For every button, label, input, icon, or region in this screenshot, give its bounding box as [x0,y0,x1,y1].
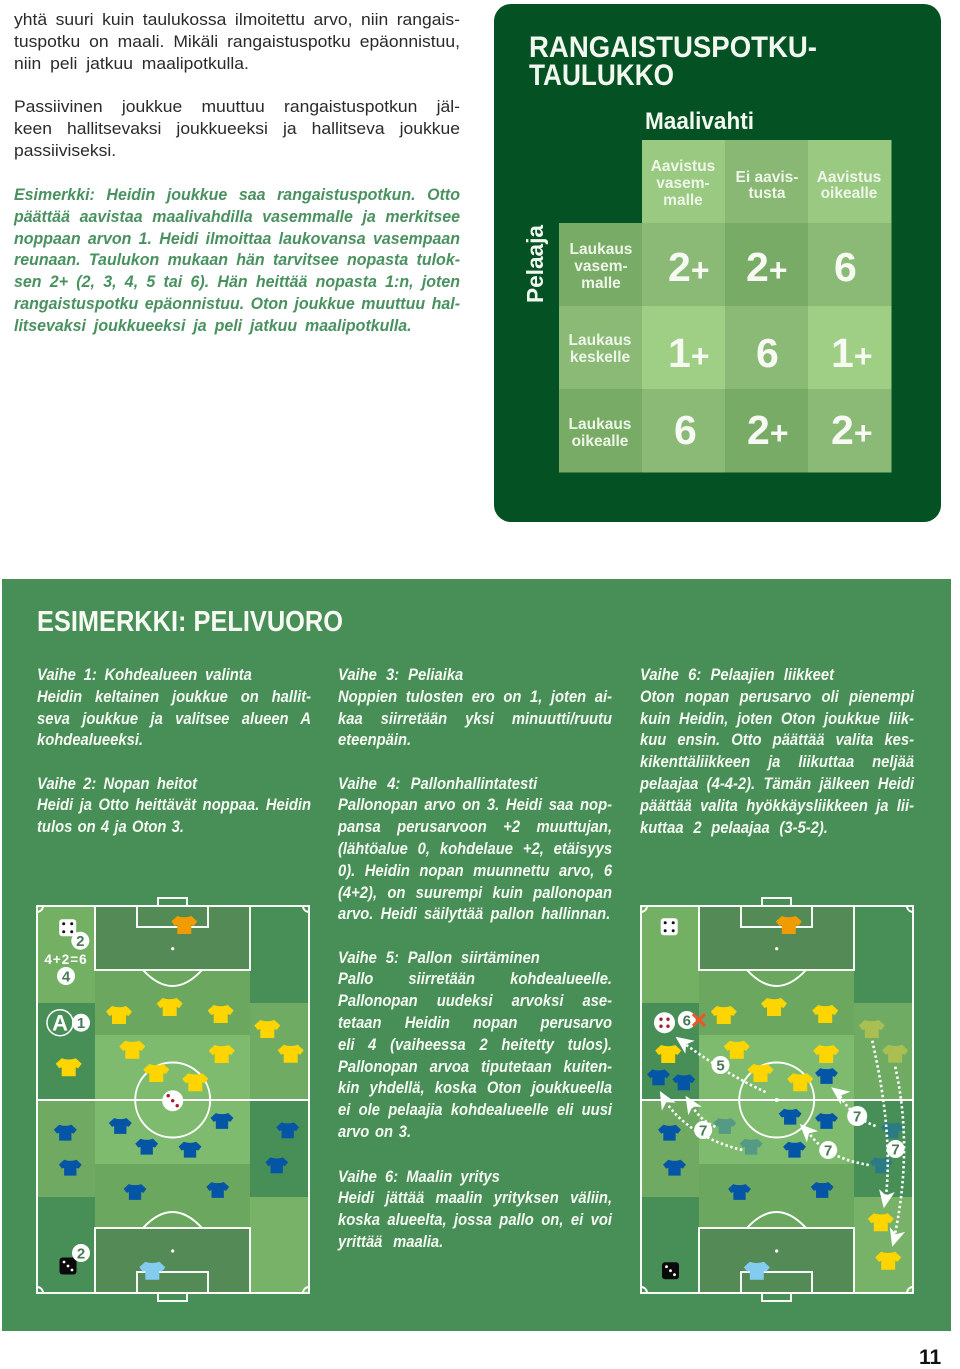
step badges: 7 [824,1142,832,1160]
table header labels: tusta [748,185,786,202]
goalkeeper orange [775,916,801,934]
text: step 6 player moves: Vaihe 6: Pelaajien liikkeet [640,665,834,684]
yellow team [655,998,901,1270]
text: step 6 player moves [640,665,914,837]
text block: penalty example: litsevaksi joukkueeksi ja peli jatkuu maalipotkulla. [14,316,412,335]
white die four [59,919,76,936]
text block: penalty example: reunaan. Taulukon mukaan hän tarvitsee nopasta tulok- [14,250,460,269]
table values: 1+ [831,330,872,376]
text: step 3: Vaihe 3: Peliaika [338,665,463,684]
text: step 1 [37,665,311,749]
text: step 4: (4+2), on suurempi kuin pallonopan [338,883,612,902]
text block: penalty example: Esimerkki: Heidin joukkue saa rangaistuspotkun. Otto [14,185,460,204]
badge 4: 4 [62,968,71,986]
step badges: 7 [699,1122,707,1140]
text block: rule continuation: tuspotku on maali. Mikäli rangaistuspotku epäonnistuu, [14,32,460,51]
text: step 2: Heidi ja Otto heittävät noppaa. Heidin [37,795,311,814]
text: step 5: tetaan Heidin nopan perusarvo [338,1013,612,1032]
orange cross [692,1014,704,1026]
text: step 3: Noppien tulosten ero on 1, joten ai- [338,687,612,706]
ball die [162,1090,183,1111]
text: step 5: Pallo siirretään kohdealueelle. [338,969,612,988]
text: step 6 goal attempt [337,1166,612,1251]
table row labels: oikealle [572,433,629,450]
text: step 4: Pallonopan arvo on 3. Heidi saa nop- [338,795,612,814]
table values: 2+ [746,244,788,290]
yellow team [56,998,304,1091]
white die [660,918,677,935]
chart: right pitch [640,897,914,1302]
table values: 6 [674,407,697,453]
faded moved blue [713,1118,903,1173]
axis label: player: Pelaaja [522,225,548,303]
step badges: 7 [853,1108,861,1126]
table header labels: oikealle [821,185,878,202]
table row labels: Laukaus [569,332,631,349]
table header labels: Aavistus [651,158,715,175]
dotted movement arrows [652,1030,905,1249]
table row labels [569,241,632,450]
panel: example turn background [2,579,951,1331]
table header labels: Ei aavis- [736,169,798,186]
black die [662,1262,678,1279]
table title: TAULUKKO [529,59,674,92]
badge 6 [677,1011,695,1030]
text: step 4: arvo. Heidi säilyttää pallon hallinnan. [338,904,610,923]
text block: penalty example: rangaistuspotku epäonnistuu. Oton joukkue muuttuu hal- [14,294,460,313]
text: step 2: tulos on 4 ja Oton 3. [37,817,184,836]
table values: 1+ [668,330,710,376]
text: step 1: Vaihe 1: Kohdealueen valinta [37,665,252,684]
area A marker: A [52,1011,68,1036]
goalkeeper orange [171,916,197,934]
table row labels: malle [581,275,621,292]
text: step 6 goal attempt: koska alueelta, jossa pallo on, ei voi [338,1210,612,1229]
text: step 6 goal attempt: yrittää maalia. [338,1232,443,1251]
centre spot [774,1098,778,1102]
text: step 1: kohdealueeksi. [37,730,143,749]
faded moved yellow [858,1020,908,1063]
text: step 1: seva joukkue ja valitsee alueen A [37,709,311,728]
ball die four [654,1012,674,1033]
table title: RANGAISTUSPOTKU- [529,31,817,64]
text block: passive team: passiiviseksi. [14,141,116,160]
table title [529,31,817,92]
page number: 11 [919,1346,941,1369]
goalkeeper light blue [139,1262,165,1280]
text block: penalty example: päättää aavistaa maalivahdilla vasemmalle ja merkitsee [14,207,460,226]
text: step 5: eli 4 (vaiheessa 2 heitetty tulos). [338,1035,612,1054]
table values: 2+ [831,407,872,453]
text: step 6 player moves: kuttaa 2 pelaajaa (3-5-2). [640,818,828,837]
blue team [54,1113,299,1200]
table cells [559,140,892,472]
text: step 6 player moves: kikenttäliikkeen ja liikuttaa neljää [640,752,914,771]
black die [60,1258,76,1274]
badge 1 [72,1014,90,1032]
text block: passive team: keen hallitsevaksi joukkueeksi ja hallitseva joukkue [14,119,460,138]
text: step 5: ei ole pelaajia kohdealueelle eli uusi [338,1100,612,1119]
text: step 6 goal attempt: Heidi jättää maalin yrityksen väliin, [338,1188,612,1207]
text: step 6 player moves: kuin Heidin, joten Oton joukkue liik- [640,709,914,728]
badge 1: 1 [77,1015,85,1032]
text: step 3 [338,665,612,749]
step badges [694,1056,904,1160]
text: step 6 player moves: kuu ensin. Otto päättää valita kes- [640,730,914,749]
text: step 5: Pallonopan arvoa tiputetaan kuiten- [338,1057,612,1076]
text: step 6 player moves: Oton nopan perusarvo oli pienempi [640,687,914,706]
chart: left pitch [36,897,310,1302]
table header labels: Aavistus [817,169,881,186]
text block: passive team [14,97,460,160]
text: step 4: (lähtöalue 0, kohdelaue +2, etäisyys [338,839,612,858]
table header labels: malle [663,192,703,209]
blue team [647,1068,837,1200]
text block: penalty example: sen 2+ (2, 3, 4, 5 tai 6). Hän heittää nopasta 1:n, joten [14,272,460,291]
text: step 6 goal attempt: Vaihe 6: Maalin yritys [338,1166,500,1186]
table row labels: vasem- [574,258,628,275]
text block: rule continuation [14,10,460,73]
text: step 4 [338,774,612,923]
panel: penalty table [494,4,941,522]
text: step 4: 0). Heidin nopan muunnettu arvo, 6 [338,861,612,880]
table values [668,244,872,453]
goalkeeper light blue [743,1262,769,1280]
step badges: 5 [716,1058,724,1074]
text: step 3: eteenpäin. [338,730,411,749]
step badges: 7 [891,1142,899,1158]
badge 6: 6 [682,1012,690,1030]
badge 2 lower [72,1244,90,1262]
text block: rule continuation: niin peli jatkuu maalipotkulla. [14,54,249,73]
table values: 6 [834,244,857,290]
text: step 3: kaa siirretään yksi minuutti/ruutu [338,709,612,728]
text: step 6 player moves: päättää valita hyökkäysliikkeen ja lii- [640,796,914,815]
table row labels: Laukaus [569,416,631,433]
text block: penalty example [14,185,460,335]
table row labels: keskelle [570,349,631,366]
table header labels [651,158,881,209]
text: step 5: Vaihe 5: Pallon siirtäminen [338,948,540,966]
sum label: 4+2=6 [44,952,88,967]
text: step 5 [338,948,612,1141]
text: step 2: Vaihe 2: Nopan heitot [37,774,197,792]
table values: 2+ [747,407,788,453]
badge 2: 2 [76,933,84,950]
badge 2 [71,932,89,950]
text block: passive team: Passiivinen joukkue muuttuu rangaistuspotkun jäl- [14,97,460,116]
text: step 5: Pallonopan uudeksi arvoksi ase- [338,991,612,1010]
text: step 4: Vaihe 4: Pallonhallintatesti [338,774,537,792]
badge 2 lower: 2 [77,1246,85,1262]
text block: rule continuation: yhtä suuri kuin taulukossa ilmoitettu arvo, niin rangais- [14,10,460,29]
text: step 6 player moves: pelaajaa (4-4-2). Tämän jälkeen Heidi [640,774,914,793]
text: step 1: Heidin keltainen joukkue on hallit- [37,687,311,706]
table header labels: vasem- [656,175,710,192]
text: step 4: pansa perusarvoon +2 muuttujan, [338,817,612,836]
table values: 6 [756,330,779,376]
table values: 2+ [668,244,710,290]
axis label: goalkeeper: Maalivahti [645,108,754,135]
table row labels: Laukaus [570,241,632,258]
badge 4 [57,967,75,986]
text: step 2 [37,774,311,836]
area A marker [47,1010,73,1036]
text: step 5: arvo on 3. [338,1122,411,1141]
heading: example: ESIMERKKI: PELIVUORO [37,606,343,638]
text: step 5: kin yhdellä, koska Oton joukkueella [338,1078,612,1097]
text block: penalty example: noppaan arvon 1. Heidi ilmoittaa laukovansa vasempaan [14,229,460,248]
